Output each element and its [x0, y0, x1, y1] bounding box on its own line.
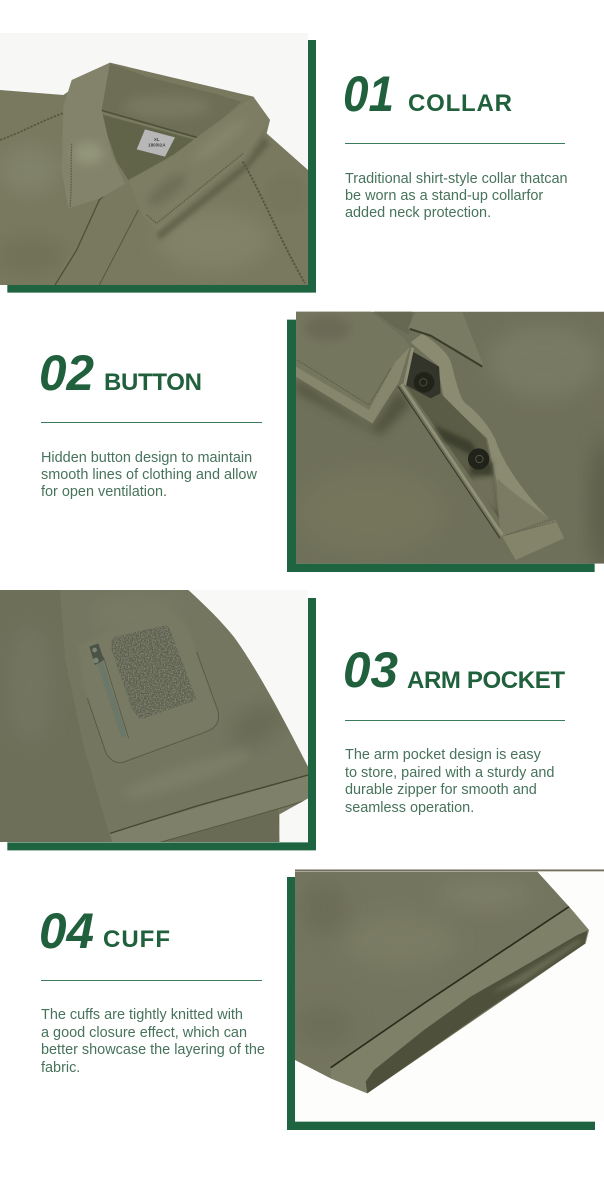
placket	[53, 187, 139, 285]
text block: 04 cuff	[39, 903, 265, 1076]
size label: 180/92A	[148, 143, 166, 148]
back collar	[100, 63, 242, 138]
panel: arm pocket photo with green frame	[0, 590, 316, 850]
button 2	[468, 448, 489, 470]
inner neck	[100, 114, 198, 180]
description: The arm pocket design is easy	[345, 747, 542, 763]
heading: 04 CUFF: CUFF	[103, 926, 170, 953]
panel: collar photo with green frame	[0, 33, 316, 293]
green frame	[7, 40, 316, 293]
description	[345, 747, 554, 816]
illustration: button placket	[296, 312, 604, 572]
left placket edge	[401, 384, 502, 535]
divider line	[345, 720, 565, 721]
description: for open ventilation.	[41, 484, 167, 500]
description: a good closure effect, which can	[41, 1025, 247, 1041]
description: seamless operation.	[345, 800, 474, 816]
heading: 01 COLLAR: COLLAR	[408, 90, 512, 117]
zipper	[89, 643, 129, 738]
velcro patch	[111, 626, 197, 718]
heading: 03 ARM POCKET: ARM POCKET	[407, 667, 565, 694]
illustration: sleeve with arm pocket	[0, 590, 308, 843]
left collar leaf	[62, 63, 125, 208]
placket	[411, 333, 549, 537]
placket tab	[502, 520, 564, 560]
description: Hidden button design to maintain	[41, 450, 252, 466]
heading: 02 BUTTON	[39, 345, 202, 401]
cuff inner	[366, 930, 589, 1093]
heading: 01 COLLAR: 01	[343, 66, 394, 122]
heading: 01 COLLAR	[343, 66, 512, 122]
description: The cuffs are tightly knitted with	[41, 1007, 243, 1023]
description: be worn as a stand-up collarfor	[345, 188, 543, 204]
text block: 01 collar	[343, 66, 568, 221]
panel: button photo with green frame	[287, 312, 604, 572]
size label	[137, 129, 175, 157]
description: smooth lines of clothing and allow	[41, 467, 257, 483]
text block: 03 arm pocket	[343, 642, 565, 816]
description	[345, 171, 568, 221]
heading: 04 CUFF	[39, 903, 170, 959]
green frame	[7, 598, 316, 850]
description: fabric.	[41, 1060, 80, 1076]
heading: 03 ARM POCKET: 03	[343, 642, 398, 698]
panel: cuff photo with green frame	[287, 869, 604, 1130]
description: durable zipper for smooth and	[345, 782, 537, 798]
heading: 02 BUTTON: 02	[39, 345, 94, 401]
green frame	[287, 877, 595, 1130]
description: added neck protection.	[345, 205, 491, 221]
description: better showcase the layering of the	[41, 1042, 265, 1058]
description	[41, 1007, 265, 1076]
divider line	[41, 422, 262, 423]
heading: 03 ARM POCKET	[343, 642, 565, 698]
pocket outline	[87, 652, 219, 763]
right collar leaf	[176, 96, 270, 154]
pocket area	[78, 607, 219, 763]
illustration: shirt collar	[0, 33, 308, 287]
placket opening	[406, 352, 499, 518]
description	[41, 450, 257, 500]
right collar leaf	[408, 312, 484, 367]
illustration: sleeve cuff	[294, 869, 604, 1122]
description: Traditional shirt-style collar thatcan	[345, 171, 568, 187]
heading: 04 CUFF: 04	[39, 903, 94, 959]
green frame	[287, 320, 595, 572]
left collar leaf	[296, 312, 371, 313]
divider line	[345, 143, 565, 144]
cuff band	[331, 907, 589, 1093]
size label: XL	[154, 137, 160, 142]
collar shadow	[296, 380, 411, 435]
button 1	[414, 372, 434, 393]
divider line	[41, 980, 262, 981]
description: to store, paired with a sturdy and	[345, 765, 554, 781]
heading: 02 BUTTON: BUTTON	[104, 369, 202, 396]
text block: 02 button	[39, 345, 262, 500]
